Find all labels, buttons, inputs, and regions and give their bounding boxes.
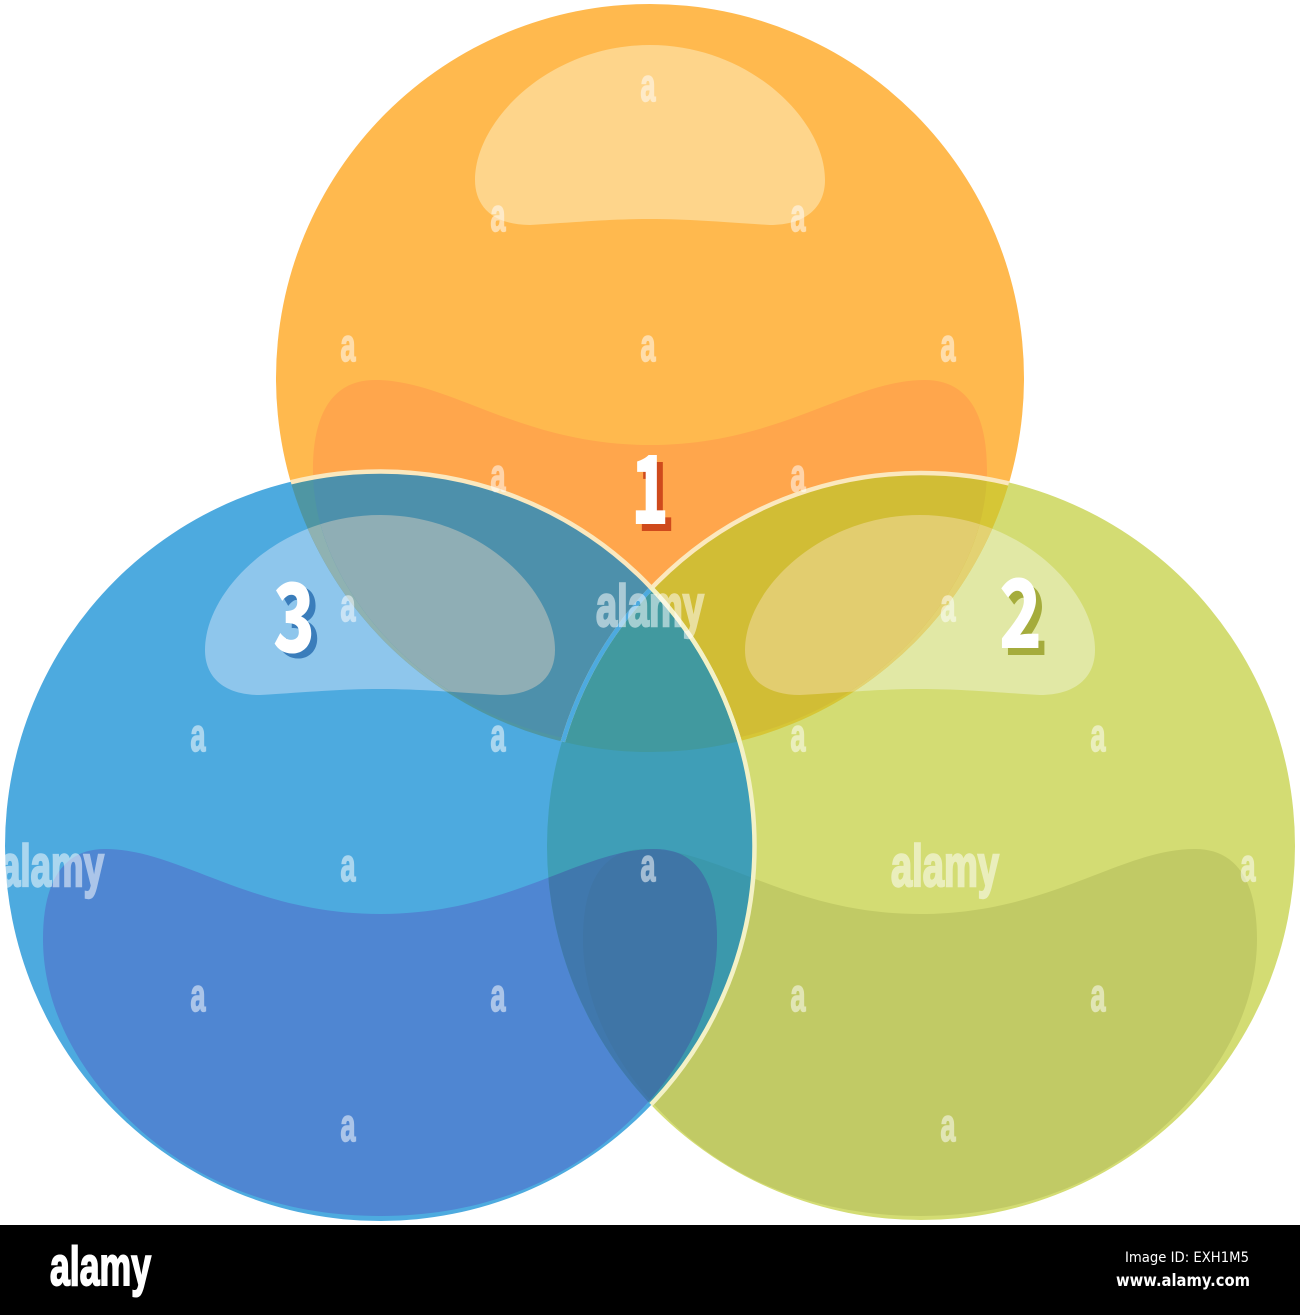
watermark: repeated small marks: a: [1090, 969, 1106, 1021]
circle 3: blue: [5, 471, 755, 1221]
number 2: 2: [999, 539, 1042, 676]
overlap: orange and blue: [290, 474, 648, 742]
circle 2: green: [547, 472, 1295, 1220]
watermark: repeated small marks: a: [640, 319, 656, 371]
watermark: repeated small marks: a: [340, 579, 356, 631]
number 3: 3: [279, 548, 321, 685]
watermark: repeated small marks: a: [340, 319, 356, 371]
footer url: www.alamy.com: [1116, 1271, 1250, 1291]
watermark: repeated small marks: a: [940, 579, 956, 631]
watermark: repeated small marks: a: [940, 319, 956, 371]
watermark: repeated small marks: a: [490, 189, 506, 241]
watermark: repeated small marks: a: [340, 839, 356, 891]
watermark: alamy right: alamy: [891, 834, 999, 899]
number 3: 3: [273, 543, 315, 680]
circle 1: orange: [276, 4, 1024, 752]
watermark: repeated small marks: a: [640, 59, 656, 111]
watermark: repeated small marks: a: [640, 839, 656, 891]
footer logo: alamy: [50, 1235, 151, 1297]
circle outlines at overlaps: [290, 469, 1010, 1106]
watermark: repeated small marks: a: [340, 1099, 356, 1151]
watermark: alamy left: alamy: [0, 834, 104, 899]
watermark: repeated small marks: a: [790, 449, 806, 501]
watermark: repeated small marks: a: [790, 189, 806, 241]
watermark: repeated small marks: a: [190, 709, 206, 761]
number 1: 1: [631, 415, 669, 552]
watermark: repeated small marks: a: [490, 969, 506, 1021]
footer image id: Image ID: EXH1M5: [1125, 1250, 1249, 1266]
watermark: repeated small marks: a: [940, 1099, 956, 1151]
watermark: repeated small marks: a: [790, 969, 806, 1021]
watermark: alamy centre: alamy: [596, 574, 704, 639]
watermark: repeated small marks: a: [790, 709, 806, 761]
overlap: green and blue: [292, 469, 1010, 1106]
number 1: 1: [637, 422, 675, 559]
watermark: repeated small marks: [190, 59, 1256, 1151]
watermark: repeated small marks: a: [1240, 839, 1256, 891]
watermark: repeated small marks: a: [1090, 709, 1106, 761]
watermark: repeated small marks: a: [490, 449, 506, 501]
watermark: repeated small marks: a: [190, 969, 206, 1021]
number 2: 2: [1005, 546, 1048, 683]
watermark: repeated small marks: a: [490, 709, 506, 761]
overlap: orange and green: [654, 475, 1009, 740]
footer bar: [0, 1225, 1300, 1315]
